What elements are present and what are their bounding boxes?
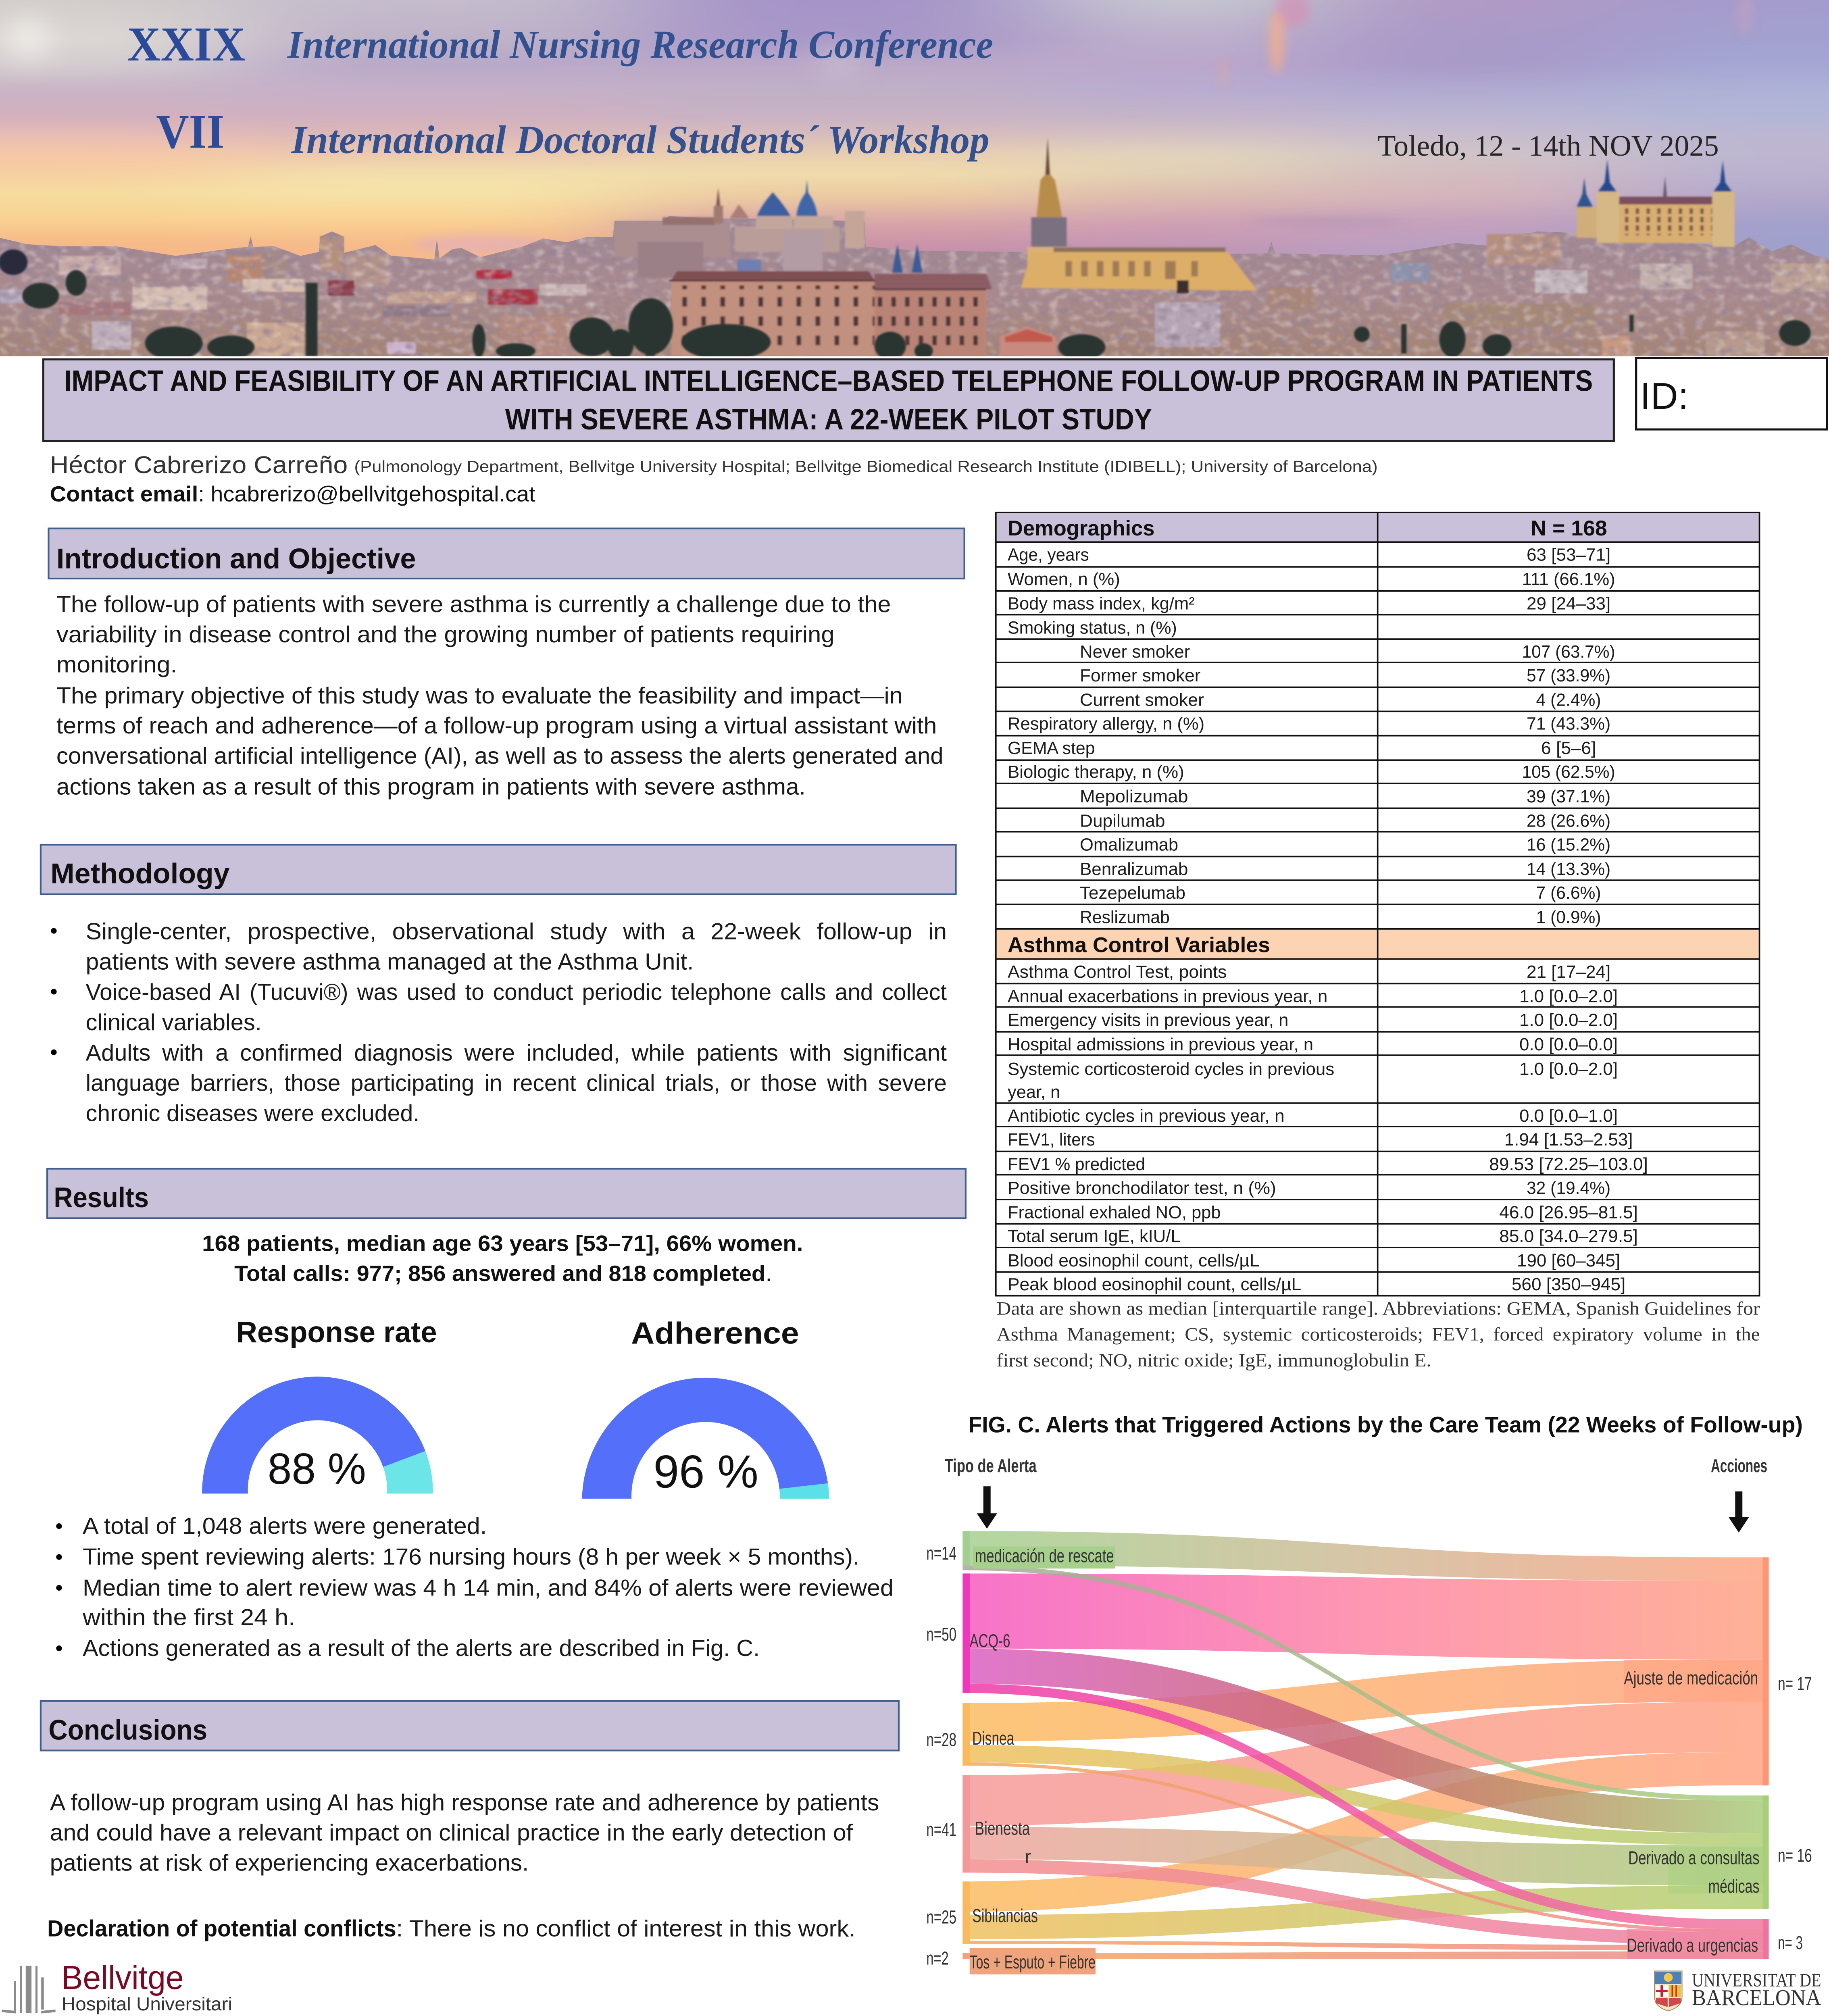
heading: introduction <box>48 529 964 579</box>
heading: results <box>47 1169 966 1218</box>
demographics row labels: Tezepelumab <box>1080 883 1185 903</box>
demographics row labels: Reslizumab <box>1080 908 1170 927</box>
demographics values: 63 [53–71] <box>1527 545 1610 564</box>
demographics values: 29 [24–33] <box>1527 594 1610 613</box>
gauge: response rate <box>202 1316 437 1493</box>
action labels: médicas <box>1708 1876 1760 1897</box>
asthma control row labels: FEV1, liters <box>1008 1130 1095 1150</box>
table footnote: Data are shown as median [interquartile range]. Abbreviations: GEMA, Spanish Guidelines for <box>996 1298 1760 1319</box>
demographics values: 107 (63.7%) <box>1522 642 1615 662</box>
shield icon <box>1654 1971 1682 2011</box>
results summary <box>202 1231 803 1286</box>
demographics values: 16 (15.2%) <box>1527 835 1610 854</box>
conference name: International Nursing Research Conference <box>287 22 993 67</box>
demographics values: 111 (66.1%) <box>1522 569 1615 589</box>
asthma control values <box>1489 962 1648 1294</box>
demographics row labels: Benralizumab <box>1080 859 1188 879</box>
action labels <box>1624 1668 1760 1956</box>
demographics values: 6 [5–6] <box>1541 739 1596 758</box>
introduction text: The follow-up of patients with severe asthma is currently a challenge due to the <box>56 591 891 617</box>
ID box: ID: <box>1640 375 1689 417</box>
results bullets: within the first 24 h. <box>82 1605 295 1630</box>
alert type labels: medicación de rescate <box>975 1545 1114 1566</box>
declaration of conflicts: : There is no conflict of interest in this work. <box>396 1916 856 1941</box>
right counts: n= 3 <box>1778 1933 1803 1953</box>
workshop number VII: VII <box>156 105 224 158</box>
demographics row labels: Former smoker <box>1080 666 1201 685</box>
methodology bullets <box>51 919 947 1126</box>
demographics row labels: Current smoker <box>1080 690 1204 710</box>
left counts: n=50 <box>926 1624 956 1645</box>
action labels: Derivado a consultas <box>1628 1847 1760 1868</box>
conclusions text: A follow-up program using AI has high response rate and adherence by patients <box>50 1790 879 1816</box>
place and date: Toledo, 12 - 14th NOV 2025 <box>1378 130 1719 162</box>
demographics row labels: Women, n (%) <box>1008 569 1120 589</box>
results summary: . <box>766 1261 772 1286</box>
asthma control row labels: Blood eosinophil count, cells/µL <box>1008 1251 1260 1270</box>
table footnote: first second; NO, nitric oxide; IgE, immunoglobulin E. <box>996 1350 1431 1371</box>
demographics values: 28 (26.6%) <box>1527 811 1610 831</box>
gauge: response rate: 88 % <box>268 1445 366 1493</box>
table header: demographics <box>996 512 1760 542</box>
heading: conclusions <box>41 1701 899 1751</box>
figure C title: FIG. C. Alerts that Triggered Actions by the Care Team (22 Weeks of Follow-up) <box>968 1412 1803 1437</box>
demographics row labels: Body mass index, kg/m² <box>1008 594 1195 613</box>
panel: results <box>47 1169 966 1661</box>
trees <box>0 250 1810 360</box>
contact email: Contact email <box>50 481 198 506</box>
contact email: : hcabrerizo@bellvitgehospital.cat <box>198 481 535 506</box>
demographics values: 71 (43.3%) <box>1527 714 1610 734</box>
methodology bullets: patients with severe asthma managed at the Asthma Unit. <box>85 949 694 975</box>
alert type labels: Tos + Esputo + Fiebre <box>970 1951 1096 1972</box>
asthma control row labels: Annual exacerbations in previous year, n <box>1008 987 1327 1006</box>
results bullets: Actions generated as a result of the alerts are described in Fig. C. <box>83 1636 760 1661</box>
methodology bullets: language barriers, those participating in recent clinical trials, or those with severe <box>85 1070 947 1096</box>
asthma control row labels: Systemic corticosteroid cycles in previous <box>1008 1059 1334 1079</box>
asthma control values: 0.0 [0.0–0.0] <box>1519 1035 1618 1054</box>
panel: introduction and objective <box>48 529 964 800</box>
alert type labels: Disnea <box>972 1728 1014 1749</box>
demographics row labels: Never smoker <box>1080 642 1190 662</box>
logo: Universitat de Barcelona: BARCELONA <box>1692 1985 1821 2010</box>
table header: asthma control variables: Asthma Control Variables <box>1008 933 1270 957</box>
sankey left nodes <box>962 1531 970 1959</box>
cathedral <box>1021 137 1257 293</box>
banner: conference header with Toledo skyline <box>0 0 1829 386</box>
demographics row labels: Omalizumab <box>1080 835 1178 854</box>
results summary: Total calls: 977; 856 answered and 818 completed <box>234 1261 765 1286</box>
right counts <box>1778 1673 1812 1953</box>
contact email <box>50 481 535 506</box>
panel: conclusions <box>41 1701 899 1941</box>
conclusions text: patients at risk of experiencing exacerbations. <box>50 1850 529 1876</box>
left counts: n=14 <box>926 1543 956 1564</box>
asthma control row labels: Fractional exhaled NO, ppb <box>1008 1203 1221 1222</box>
authors and affiliation: (Pulmonology Department, Bellvitge University Hospital; Bellvitge Biomedical Research Institute (IDIBELL); University of Barcelona) <box>354 458 1378 475</box>
brick building <box>669 271 1056 356</box>
arrow: alert type <box>977 1486 997 1529</box>
column titles: Tipo de Alerta <box>945 1456 1037 1476</box>
table footnote: Asthma Management; CS, systemic corticosteroids; FEV1, forced expiratory volume in the <box>996 1324 1760 1345</box>
city skyline <box>0 129 1829 356</box>
asthma control row labels: Positive bronchodilator test, n (%) <box>1008 1178 1276 1198</box>
asthma control row labels: Antibiotic cycles in previous year, n <box>1008 1106 1285 1126</box>
authors and affiliation <box>50 451 1378 478</box>
title box <box>43 359 1614 441</box>
asthma control row labels: Total serum IgE, kIU/L <box>1008 1227 1181 1246</box>
demographics row labels <box>1008 545 1204 927</box>
asthma control values: 85.0 [34.0–279.5] <box>1499 1227 1638 1246</box>
introduction text: The primary objective of this study was to evaluate the feasibility and impact—in <box>56 683 903 708</box>
introduction text: actions taken as a result of this program in patients with severe asthma. <box>56 774 806 800</box>
gauge: adherence <box>582 1316 829 1499</box>
ID box <box>1636 358 1827 429</box>
asthma control values: 1.0 [0.0–2.0] <box>1519 1010 1618 1030</box>
asthma control values: 560 [350–945] <box>1512 1275 1625 1294</box>
heading: results: Results <box>54 1182 149 1214</box>
table grid <box>996 512 1760 1296</box>
demographics row labels: Dupilumab <box>1080 811 1165 831</box>
asthma control values: 32 (19.4%) <box>1527 1178 1610 1198</box>
demographics row labels: Age, years <box>1008 545 1089 564</box>
logo: Universitat de Barcelona <box>1654 1970 1821 2011</box>
conclusions text <box>50 1790 879 1876</box>
demographics values: 57 (33.9%) <box>1527 666 1610 685</box>
sky <box>0 0 1829 386</box>
heading: introduction: Introduction and Objective <box>56 543 416 575</box>
right counts: n= 16 <box>1778 1845 1812 1866</box>
demographics values: 7 (6.6%) <box>1536 883 1601 903</box>
asthma control values: 1.94 [1.53–2.53] <box>1504 1130 1633 1150</box>
asthma control values: 0.0 [0.0–1.0] <box>1519 1106 1618 1126</box>
introduction text <box>56 591 944 800</box>
gauge: response rate: Response rate <box>236 1316 437 1349</box>
asthma control row labels: FEV1 % predicted <box>1008 1154 1145 1174</box>
left counts: n=2 <box>926 1948 949 1968</box>
demographics row labels: Respiratory allergy, n (%) <box>1008 714 1204 734</box>
arrow: actions <box>1729 1491 1749 1533</box>
methodology bullets: Single-center, prospective, observational study with a 22-week follow-up in <box>85 919 947 944</box>
asthma control row labels: Peak blood eosinophil count, cells/µL <box>1008 1275 1301 1294</box>
workshop name: International Doctoral Students´ Workshop <box>291 117 989 162</box>
left counts: n=41 <box>926 1819 956 1840</box>
Alcazar fortress <box>1577 159 1735 247</box>
heading: methodology <box>41 845 956 894</box>
demographics values: 14 (13.3%) <box>1527 859 1610 879</box>
table header: demographics: N = 168 <box>1531 517 1607 540</box>
asthma control values: 89.53 [72.25–103.0] <box>1489 1154 1648 1174</box>
results bullets: A total of 1,048 alerts were generated. <box>83 1514 487 1539</box>
right district buildings <box>1154 234 1829 356</box>
heading: methodology: Methodology <box>50 858 230 890</box>
asthma control row labels: Hospital admissions in previous year, n <box>1008 1035 1313 1054</box>
results bullets: Median time to alert review was 4 h 14 min, and 84% of alerts were reviewed <box>83 1575 894 1601</box>
declaration of conflicts: Declaration of potential conflicts <box>47 1916 396 1941</box>
asthma control values: 190 [60–345] <box>1517 1251 1620 1270</box>
results bullets: Time spent reviewing alerts: 176 nursing hours (8 h per week × 5 months). <box>83 1544 859 1570</box>
results bullets <box>56 1514 894 1661</box>
demographics values: 4 (2.4%) <box>1536 690 1601 710</box>
asthma control row labels: Asthma Control Test, points <box>1008 962 1227 982</box>
sankey right nodes <box>1624 1557 1769 1959</box>
label patches <box>970 1546 1115 1974</box>
asthma control values: 1.0 [0.0–2.0] <box>1519 987 1618 1006</box>
demographics row labels: Smoking status, n (%) <box>1008 618 1177 637</box>
asthma control values: 1.0 [0.0–2.0] <box>1519 1059 1618 1079</box>
right counts: n= 17 <box>1778 1673 1812 1694</box>
alert type labels: Bienesta <box>975 1818 1030 1839</box>
demographics values <box>1522 545 1615 927</box>
conference number XXIX: XXIX <box>127 17 245 71</box>
demographics row labels: Biologic therapy, n (%) <box>1008 762 1184 782</box>
action labels: Derivado a urgencias <box>1627 1935 1758 1956</box>
table header: asthma control variables <box>996 929 1760 959</box>
gauge: adherence: 96 % <box>653 1445 758 1497</box>
panel: methodology <box>41 845 956 1126</box>
heading: conclusions: Conclusions <box>48 1714 207 1746</box>
logo: Bellvitge Hospital Universitari <box>2 1959 232 2014</box>
sankey chart: alert types to actions <box>926 1456 1812 1974</box>
left counts: n=28 <box>926 1729 956 1750</box>
methodology bullets: Adults with a confirmed diagnosis were included, while patients with significant <box>85 1040 947 1066</box>
demographics values: 39 (37.1%) <box>1527 787 1610 806</box>
authors and affiliation: Héctor Cabrerizo Carreño <box>50 451 348 478</box>
methodology bullets: chronic diseases were excluded. <box>85 1101 419 1126</box>
demographics row labels: GEMA step <box>1008 739 1095 758</box>
palace with blue domes <box>615 180 923 278</box>
sankey flows <box>962 1531 1769 1959</box>
alert type labels <box>970 1545 1114 1972</box>
logo: Bellvitge Hospital Universitari: Bellvitge <box>61 1959 184 1996</box>
gauge: adherence: Adherence <box>631 1316 799 1350</box>
asthma control row labels: Emergency visits in previous year, n <box>1008 1010 1288 1030</box>
title box: IMPACT AND FEASIBILITY OF AN ARTIFICIAL INTELLIGENCE–BASED TELEPHONE FOLLOW-UP PROGRAM IN PATIENTS <box>64 364 1593 397</box>
column titles: Acciones <box>1711 1456 1767 1476</box>
alert type labels: Sibilancias <box>972 1906 1038 1926</box>
asthma control row labels: year, n <box>1008 1083 1060 1102</box>
declaration of conflicts <box>47 1916 856 1941</box>
introduction text: conversational artificial intelligence (AI), as well as to assess the alerts generated and <box>56 744 944 769</box>
methodology bullets: clinical variables. <box>85 1010 262 1035</box>
table: demographics and asthma control <box>996 512 1760 1296</box>
alert type labels: ACQ-6 <box>970 1630 1010 1651</box>
left counts: n=25 <box>926 1907 956 1927</box>
demographics row labels: Mepolizumab <box>1080 787 1188 806</box>
introduction text: monitoring. <box>56 652 177 678</box>
introduction text: terms of reach and adherence—of a follow-up program using a virtual assistant with <box>56 713 937 739</box>
demographics values: 1 (0.9%) <box>1536 908 1601 927</box>
action labels: Ajuste de medicación <box>1624 1668 1758 1688</box>
demographics values: 105 (62.5%) <box>1522 762 1615 782</box>
logo: Bellvitge Hospital Universitari: Hospital Universitari <box>62 1993 232 2014</box>
introduction text: variability in disease control and the growing number of patients requiring <box>56 622 835 648</box>
left district buildings <box>0 237 587 356</box>
asthma control values: 46.0 [26.95–81.5] <box>1499 1203 1638 1222</box>
alert type labels: r <box>1025 1846 1031 1867</box>
table footnote <box>996 1298 1760 1371</box>
conclusions text: and could have a relevant impact on clinical practice in the early detection of <box>50 1820 853 1846</box>
asthma control values: 21 [17–24] <box>1527 962 1610 982</box>
results summary: 168 patients, median age 63 years [53–71], 66% women. <box>202 1231 803 1256</box>
asthma control row labels <box>1008 962 1334 1294</box>
column titles <box>945 1456 1767 1476</box>
left counts <box>926 1543 956 1968</box>
title box: WITH SEVERE ASTHMA: A 22-WEEK PILOT STUDY <box>505 403 1152 436</box>
methodology bullets: Voice-based AI (Tucuvi®) was used to conduct periodic telephone calls and collect <box>85 980 947 1005</box>
table header: demographics: Demographics <box>1008 517 1154 540</box>
